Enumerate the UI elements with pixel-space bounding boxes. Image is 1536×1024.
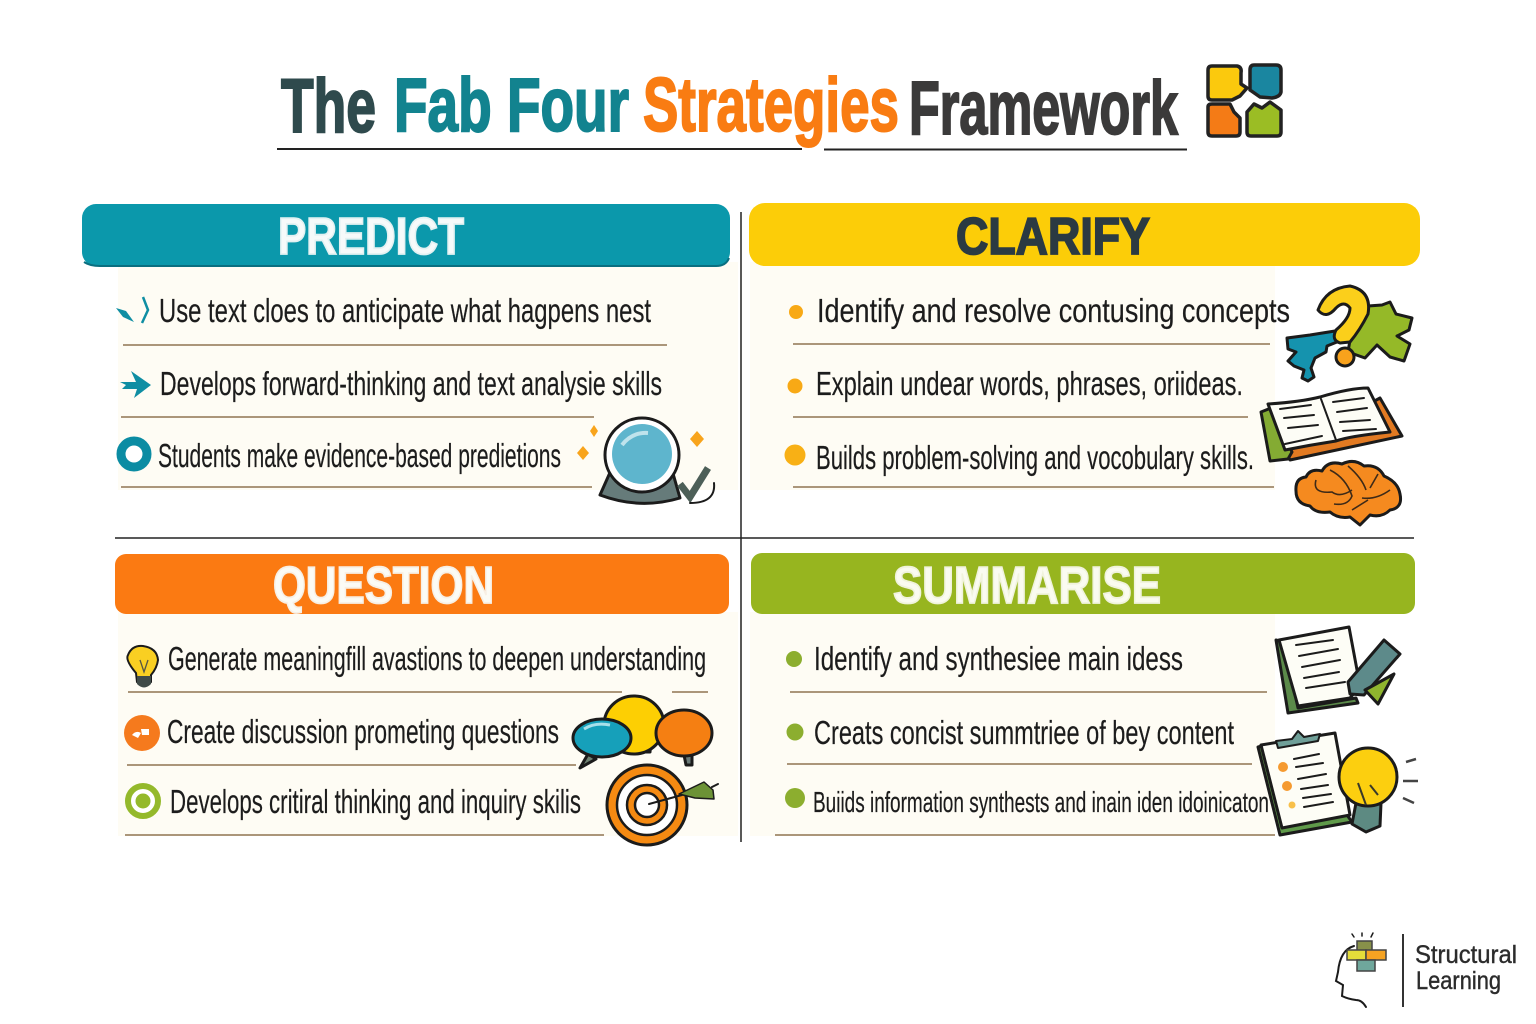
logo text: Structural	[1415, 941, 1517, 969]
question header	[115, 554, 729, 615]
clarify header: CLARIFY	[956, 208, 1150, 266]
question item 2	[124, 713, 576, 765]
predict item 2	[120, 365, 662, 417]
summarise header: SUMMARISE	[893, 557, 1161, 615]
question item 1	[127, 640, 708, 692]
predict item 1: Use text cloes to anticipate what hagpens nest	[159, 292, 651, 329]
icon: head with blocks	[1336, 933, 1386, 1007]
panel: predict	[82, 204, 738, 503]
clarify item 2: Explain undear words, phrases, oriideas.	[816, 365, 1243, 402]
panel: summarise	[750, 553, 1418, 836]
question item 1: Generate meaningfill avastions to deepen understanding	[168, 640, 706, 677]
predict header	[82, 204, 730, 266]
logo text: Learning	[1416, 967, 1501, 995]
summarise item 3: Buiids information synthests and inain iden idoinicaton	[813, 787, 1269, 819]
title: Framework	[909, 66, 1178, 151]
summarise item 3	[775, 787, 1275, 835]
logo text	[1415, 941, 1517, 995]
icon: title puzzle	[1208, 65, 1281, 136]
question header: QUESTION	[273, 557, 494, 615]
icon: crystal ball	[577, 418, 714, 503]
clarify item 3: Builds problem-solving and vocobulary skills.	[816, 439, 1254, 476]
summarise header	[751, 553, 1415, 615]
divider lines	[115, 212, 1414, 842]
icon: target	[607, 765, 718, 845]
icon: open book	[1261, 388, 1402, 461]
summarise item 1: Identify and synthesiee main idess	[814, 640, 1183, 677]
predict item 2: Develops forward-thinking and text analysie skills	[160, 365, 662, 402]
panel: clarify	[749, 203, 1420, 525]
icon: notebook and pencil	[1276, 627, 1400, 713]
clarify item 1: Identify and resolve contusing concepts	[817, 292, 1290, 329]
clarify item 1	[789, 292, 1290, 344]
title	[277, 63, 1187, 151]
summarise item 2	[786, 714, 1252, 764]
clarify item 2	[788, 365, 1248, 417]
question item 2: Create discussion prometing questions	[167, 713, 559, 750]
predict item 3	[121, 437, 592, 487]
title: Fab Four	[394, 63, 629, 148]
logo: structural learning	[1336, 933, 1517, 1007]
title: Strategies	[643, 63, 899, 148]
title: The	[281, 64, 376, 149]
predict item 3: Students make evidence-based predietions	[158, 437, 561, 474]
question item 3: Develops critiral thinking and inquiry skilis	[170, 783, 581, 820]
clarify item 3	[784, 439, 1274, 487]
icon: clipboard and bulb	[1258, 731, 1418, 835]
panel: question	[115, 554, 738, 845]
icon: speech bubbles	[573, 696, 712, 768]
summarise item 2: Creats concist summtriee of bey content	[814, 714, 1234, 751]
question item 3	[125, 783, 604, 835]
icon: brain	[1296, 461, 1401, 525]
predict header: PREDICT	[278, 208, 464, 266]
clarify header	[749, 203, 1420, 266]
predict item 1	[116, 292, 667, 345]
icon: question puzzle	[1287, 286, 1412, 381]
summarise item 1	[786, 640, 1267, 692]
